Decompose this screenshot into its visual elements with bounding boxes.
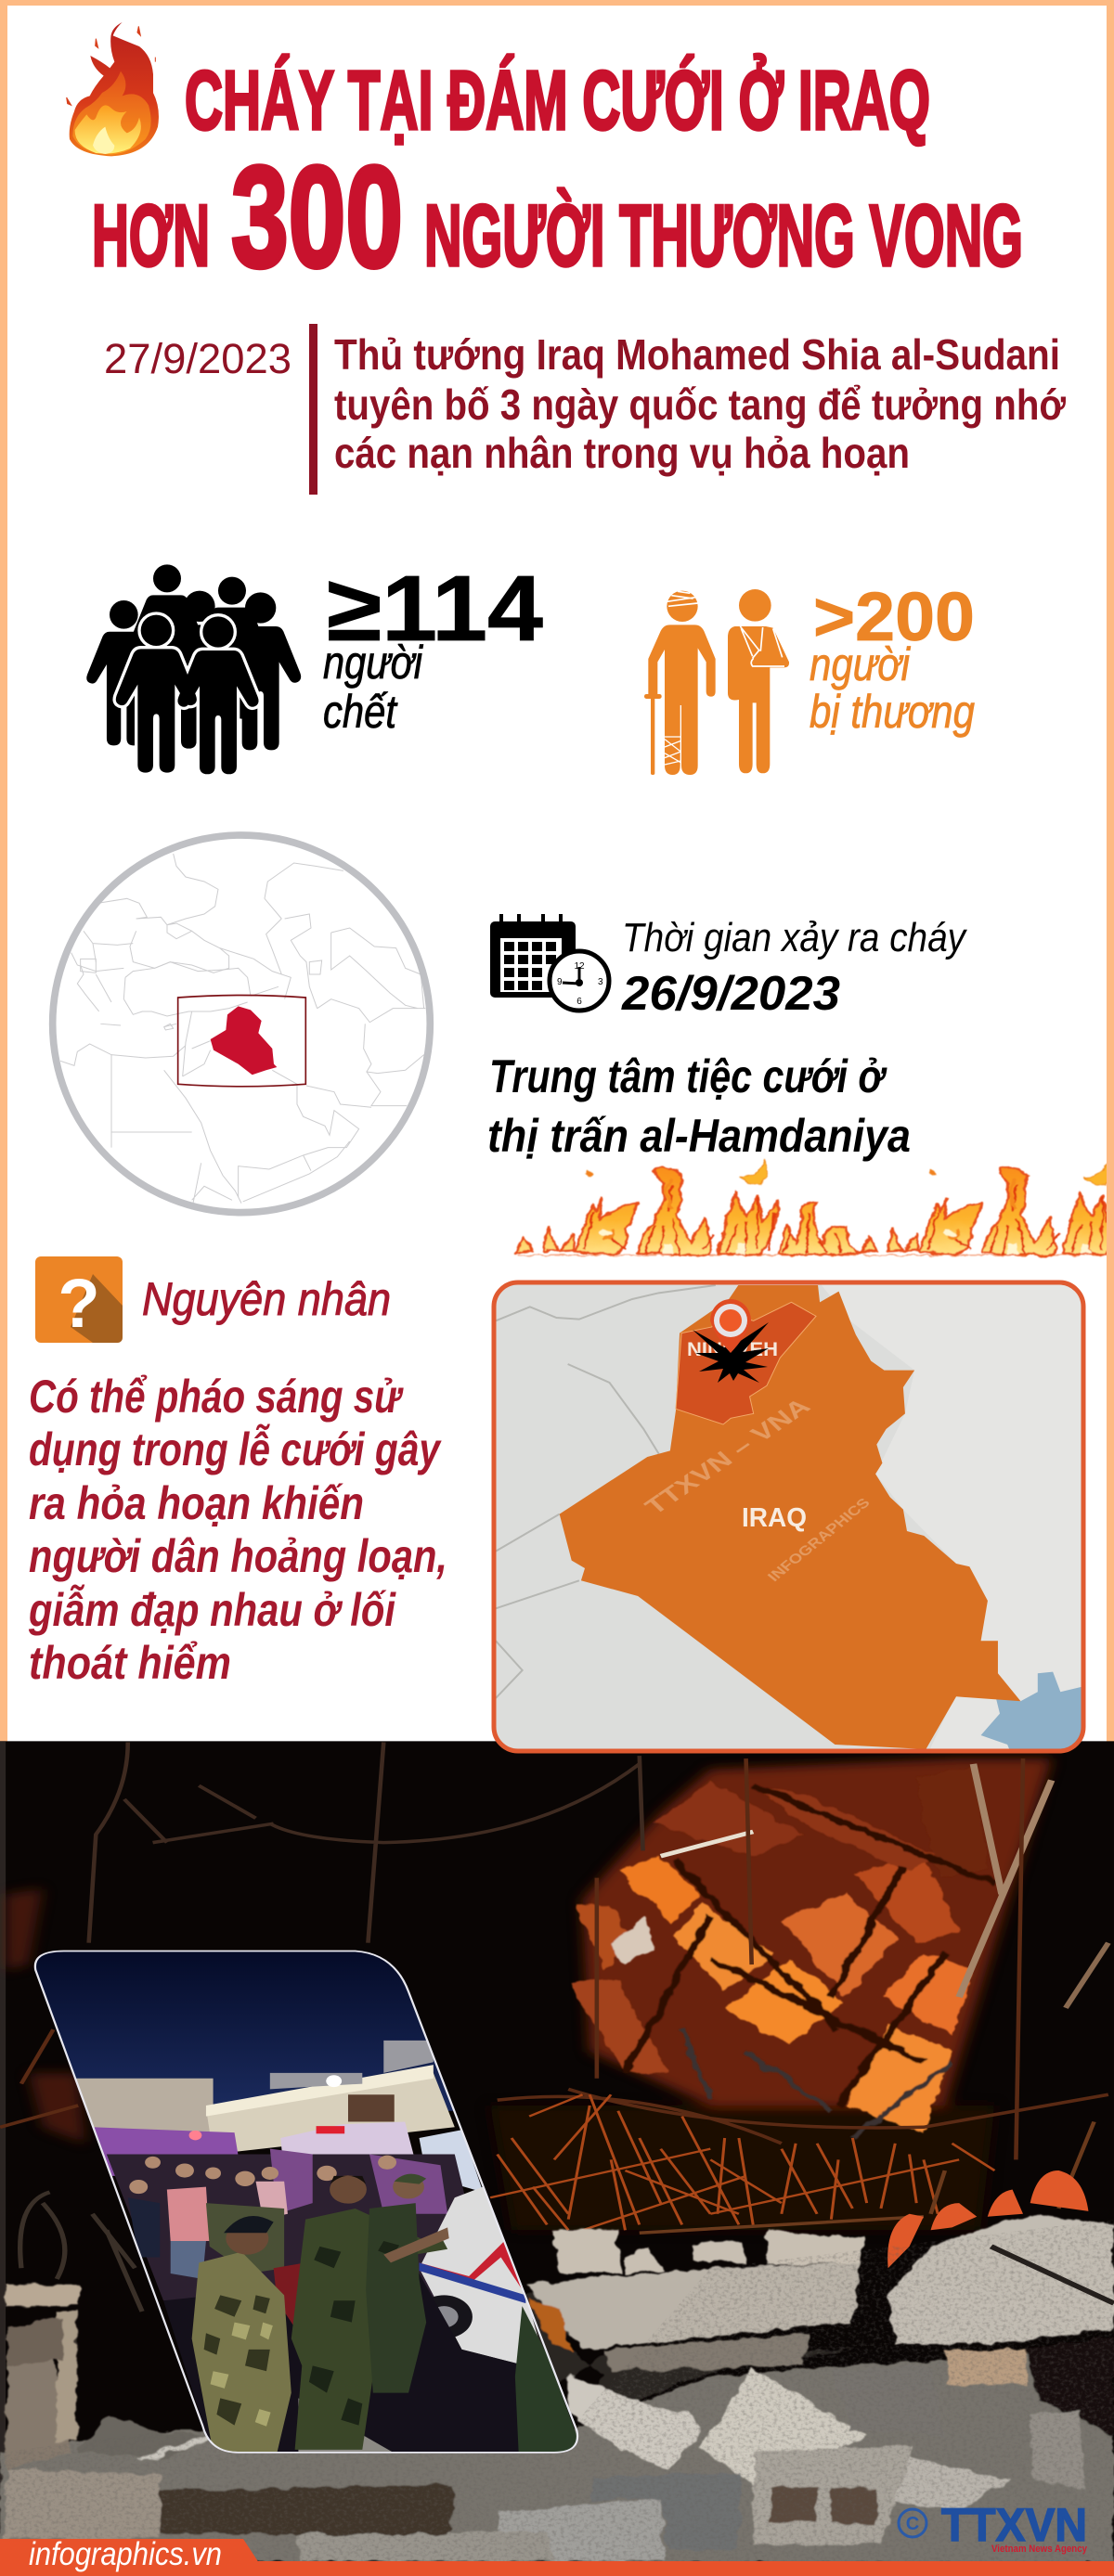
- watermarks: INFOGRAPHICS: [765, 1496, 874, 1584]
- deaths label line 2: chết: [323, 686, 398, 738]
- cause text: người dân hoảng loạn,: [29, 1530, 447, 1582]
- orange page border: [0, 0, 1114, 1745]
- injuries stat: [810, 578, 975, 738]
- night sky: [36, 1951, 453, 2111]
- highlight frame: [178, 995, 305, 1087]
- announcement text: [334, 330, 1066, 477]
- icon: question mark: [35, 1256, 123, 1343]
- cause text: dụng trong lễ cưới gây: [29, 1423, 442, 1475]
- nineveh province: [676, 1302, 816, 1424]
- right border over flames: [1107, 1151, 1114, 1271]
- province label: NINEVEH: [687, 1339, 778, 1360]
- inset frame: [35, 1951, 577, 2453]
- title number: 300: 300: [231, 136, 403, 297]
- map panel: iraq: [492, 1281, 1086, 1754]
- iraq label: IRAQ: [742, 1503, 807, 1533]
- agency logo: TTXVN: [941, 2499, 1087, 2551]
- map base: [496, 1284, 956, 1748]
- cause text: thoát hiểm: [29, 1637, 231, 1689]
- icon: fire: [67, 22, 159, 156]
- inset photo: rescue scene: [21, 1949, 589, 2455]
- agency logo: C: [906, 2514, 919, 2534]
- injuries label line 2: bị thương: [810, 686, 975, 738]
- watermarks: [640, 1394, 874, 1584]
- watermarks: TTXVN – VNA: [640, 1394, 816, 1520]
- footer bar: [0, 2561, 1114, 2576]
- locator map: [53, 835, 430, 1213]
- vertical divider: [309, 324, 317, 495]
- website text: infographics.vn: [29, 2536, 222, 2572]
- burning panels: [568, 1764, 994, 2138]
- photo: collapsed hall background: [0, 1741, 1114, 2576]
- location text: [487, 1050, 911, 1162]
- cause heading: Nguyên nhân: [142, 1273, 391, 1325]
- map border: [494, 1282, 1083, 1751]
- cause text: giẫm đạp nhau ở lối: [28, 1584, 396, 1636]
- agency logo: Vietnam News Agency: [991, 2544, 1088, 2555]
- icon: calendar and clock: 3: [598, 977, 603, 987]
- injuries number: >200: [813, 578, 975, 655]
- orange helmets: [887, 2170, 1088, 2268]
- icon: calendar and clock: 12: [574, 961, 585, 972]
- icon: injured people: [644, 589, 789, 775]
- steel beams and rebar: [0, 1743, 1108, 2312]
- globe ring: [53, 835, 430, 1213]
- icon: calendar and clock: 6: [576, 997, 582, 1007]
- location pin: [710, 1299, 751, 1353]
- deaths label line 1: người: [323, 637, 424, 689]
- fire time label: Thời gian xảy ra cháy: [622, 915, 968, 960]
- icon: calendar and clock: [490, 914, 609, 1011]
- icon: group of people: [86, 564, 301, 774]
- iraq highlighted: [211, 1006, 277, 1075]
- iraq shape: [560, 1285, 1020, 1749]
- icon: calendar and clock: 9: [557, 977, 563, 987]
- cause text: ra hỏa hoạn khiến: [29, 1477, 364, 1529]
- cause text: Có thể pháo sáng sử: [29, 1371, 404, 1423]
- rubble: [0, 2214, 1114, 2564]
- deaths stat: [323, 557, 543, 738]
- fire date: 26/9/2023: [621, 967, 840, 1021]
- soldiers: [192, 2203, 579, 2453]
- explosion marker: [693, 1322, 769, 1383]
- icon: question mark: ?: [58, 1265, 100, 1342]
- deaths number: ≥114: [327, 557, 543, 661]
- source tab: [0, 2539, 259, 2576]
- location text: Trung tâm tiệc cưới ở: [489, 1050, 887, 1102]
- glowing ceiling glow: [6, 1758, 1052, 2230]
- country outlines: [60, 854, 425, 1209]
- date: 27/9/2023: [104, 335, 291, 382]
- announcement text: các nạn nhân trong vụ hỏa hoạn: [334, 429, 910, 477]
- title: [92, 53, 1023, 297]
- flames strip: [515, 1160, 1114, 1256]
- title line 2: hơn: HƠN: [92, 187, 210, 284]
- injuries label line 1: người: [810, 638, 912, 690]
- ground: [163, 2273, 519, 2452]
- ambulance: [421, 2186, 538, 2363]
- cause text: [28, 1371, 447, 1689]
- location text: thị trấn al-Hamdaniya: [487, 1110, 911, 1162]
